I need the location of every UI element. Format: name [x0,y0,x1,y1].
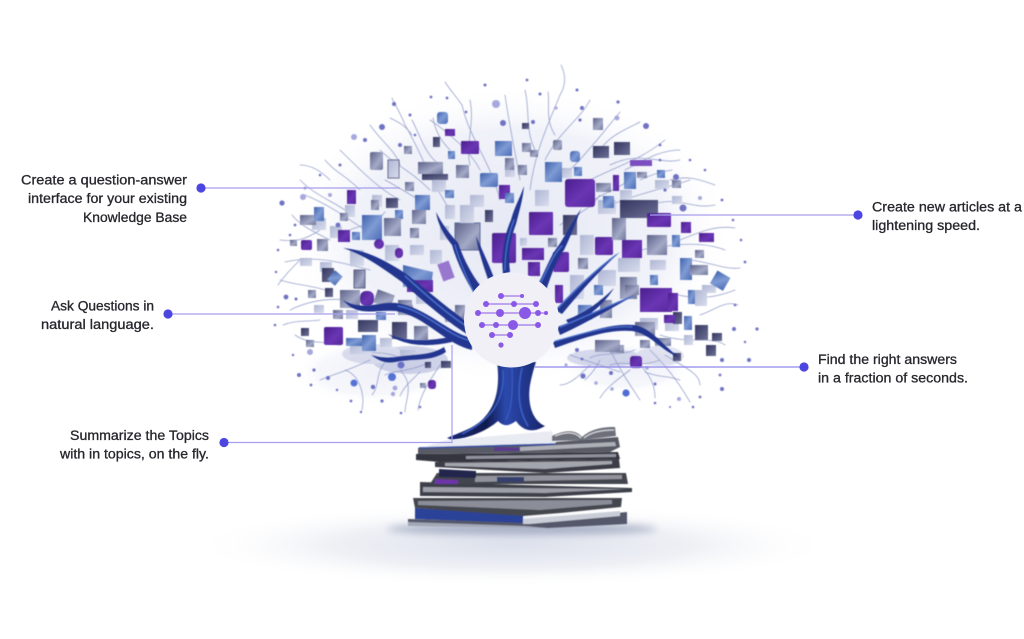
label: summarize topics: with in topics, on the fly. [59,446,209,462]
label: new articles: lightening speed. [872,218,980,233]
label: question-answer interface: interface for your existing [28,191,187,206]
left lower foliage patch [342,344,448,374]
tiles: middle canopy [300,172,714,272]
label: question-answer interface: Create a question-answer [21,172,188,188]
main branches [343,186,680,363]
book layers [408,437,632,528]
central circle [464,272,559,368]
book cover with open book [419,427,616,448]
ground shadow [187,503,837,587]
thin branches [278,65,740,412]
book stack [408,427,632,528]
label: right answers: in a fraction of seconds. [818,370,968,386]
canopy haze [285,85,735,404]
connector: summarize topics [219,345,452,447]
scattered dots [274,79,759,414]
label: new articles: Create new articles at a [872,200,1023,214]
connector: knowledge base interface [196,183,400,193]
label: right answers: Find the right answers [818,352,957,367]
label: question-answer interface: Knowledge Base [83,210,187,225]
connector: right answers [535,362,809,372]
tiles: lower canopy [301,258,730,389]
connector: ask questions [163,309,395,319]
label: summarize topics [59,428,209,462]
label: ask questions: Ask Questions in [51,298,154,314]
label: summarize topics: Summarize the Topics [70,428,209,443]
label: new articles [872,200,1023,233]
label: question-answer interface [21,172,188,225]
connector: new articles [650,210,863,220]
label: ask questions: natural language. [41,317,154,332]
trunk [447,362,545,440]
tiles: upper canopy [370,112,652,199]
label: right answers [818,352,968,386]
document tiles [300,112,730,389]
label: ask questions [41,298,154,332]
right lower foliage patch [567,346,684,367]
small scattered document tiles [290,146,716,360]
icon: network logo [475,293,548,348]
